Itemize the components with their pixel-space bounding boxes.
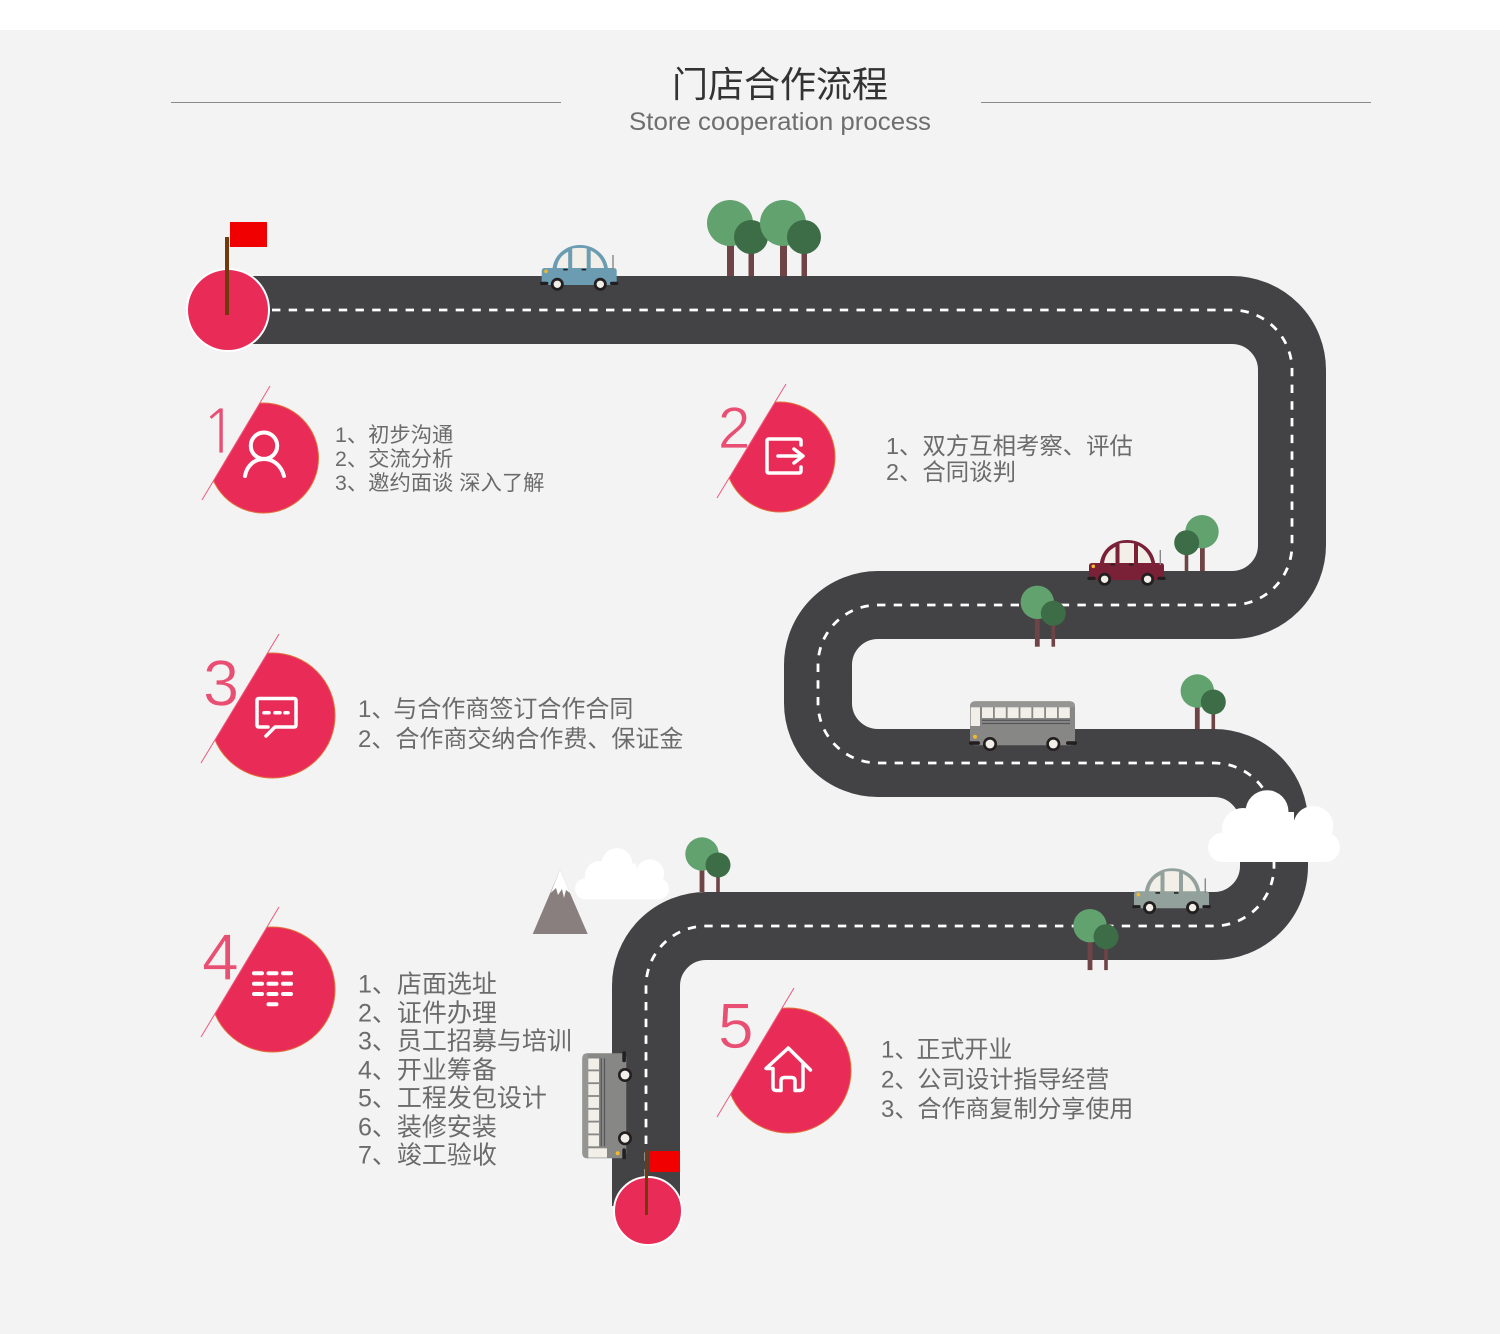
- step 5 text: [881, 1036, 1133, 1123]
- tree: third road band: [1181, 674, 1226, 729]
- step 4: [201, 907, 572, 1170]
- step 2 number: 2: [718, 396, 750, 461]
- icon: list grid: [254, 973, 291, 1004]
- step 4 text: 6、装修安装: [358, 1114, 497, 1142]
- step 1 badge: [208, 403, 318, 513]
- step 3 text: 2、合作商交纳合作费、保证金: [358, 726, 683, 753]
- step 2 text: 1、双方互相考察、评估: [886, 433, 1133, 459]
- step 2 text: [886, 433, 1133, 485]
- step 5: [717, 988, 1133, 1133]
- step 4 badge: [210, 927, 335, 1052]
- step 1: [201, 386, 544, 513]
- step 2 text: 2、合同谈判: [886, 459, 1016, 485]
- step 1 text: 3、邀约面谈 深入了解: [335, 471, 544, 495]
- step 4 text: [358, 970, 572, 1170]
- step 1 number: 1: [201, 402, 237, 462]
- step 5 text: 1、正式开业: [881, 1036, 1012, 1064]
- step 4 text: 7、竣工验收: [358, 1142, 497, 1170]
- step 1 text: [335, 423, 544, 495]
- tree: right bend: [1174, 515, 1219, 571]
- step 1 text: 1、初步沟通: [335, 423, 453, 447]
- step 2 badge: [725, 402, 835, 512]
- tree: bottom corner: [685, 837, 730, 892]
- tree: second road band: [1021, 586, 1066, 647]
- step 4 text: 2、证件办理: [358, 1000, 497, 1028]
- step 4 text: 3、员工招募与培训: [358, 1028, 572, 1056]
- trees: top pair: [707, 200, 821, 276]
- start marker: circle and flag: [187, 222, 269, 351]
- step 5 number: 5: [718, 990, 754, 1062]
- subtitle: Store cooperation process: [629, 108, 931, 136]
- step 4 text: 4、开业筹备: [358, 1056, 497, 1084]
- step 1 text: 2、交流分析: [335, 447, 453, 471]
- mountain: [533, 870, 588, 934]
- cloud: large over road: [1208, 790, 1340, 862]
- step 5 badge: [726, 1008, 851, 1133]
- step 5 text: 3、合作商复制分享使用: [881, 1096, 1133, 1123]
- step 3 badge: [210, 653, 335, 778]
- icon: speech bubble: [257, 698, 296, 736]
- end marker: circle and flag: [614, 1150, 682, 1245]
- step 3 number: 3: [203, 646, 239, 720]
- title: 门店合作流程: [672, 64, 888, 105]
- bus: vertical: [582, 1051, 632, 1159]
- car: red: [1087, 540, 1166, 586]
- step 3 text: [358, 696, 683, 753]
- header: [171, 64, 1371, 136]
- bus: horizontal: [969, 701, 1077, 751]
- step 4 text: 5、工程发包设计: [358, 1084, 547, 1112]
- step 4 text: 1、店面选址: [358, 970, 497, 998]
- icon: exit arrow: [767, 439, 803, 473]
- car: blue: [540, 245, 618, 291]
- icon: house: [766, 1048, 810, 1090]
- step 3: [201, 634, 683, 778]
- winding road: [228, 310, 1292, 1206]
- icon: person: [245, 432, 284, 476]
- step 2: [717, 384, 1133, 512]
- cloud: small: [575, 848, 669, 899]
- car: grey: [1132, 868, 1211, 914]
- tree: fourth road band: [1073, 909, 1118, 970]
- step 4 number: 4: [202, 920, 239, 994]
- step 3 text: 1、与合作商签订合作合同: [358, 696, 633, 723]
- step 5 text: 2、公司设计指导经营: [881, 1066, 1109, 1094]
